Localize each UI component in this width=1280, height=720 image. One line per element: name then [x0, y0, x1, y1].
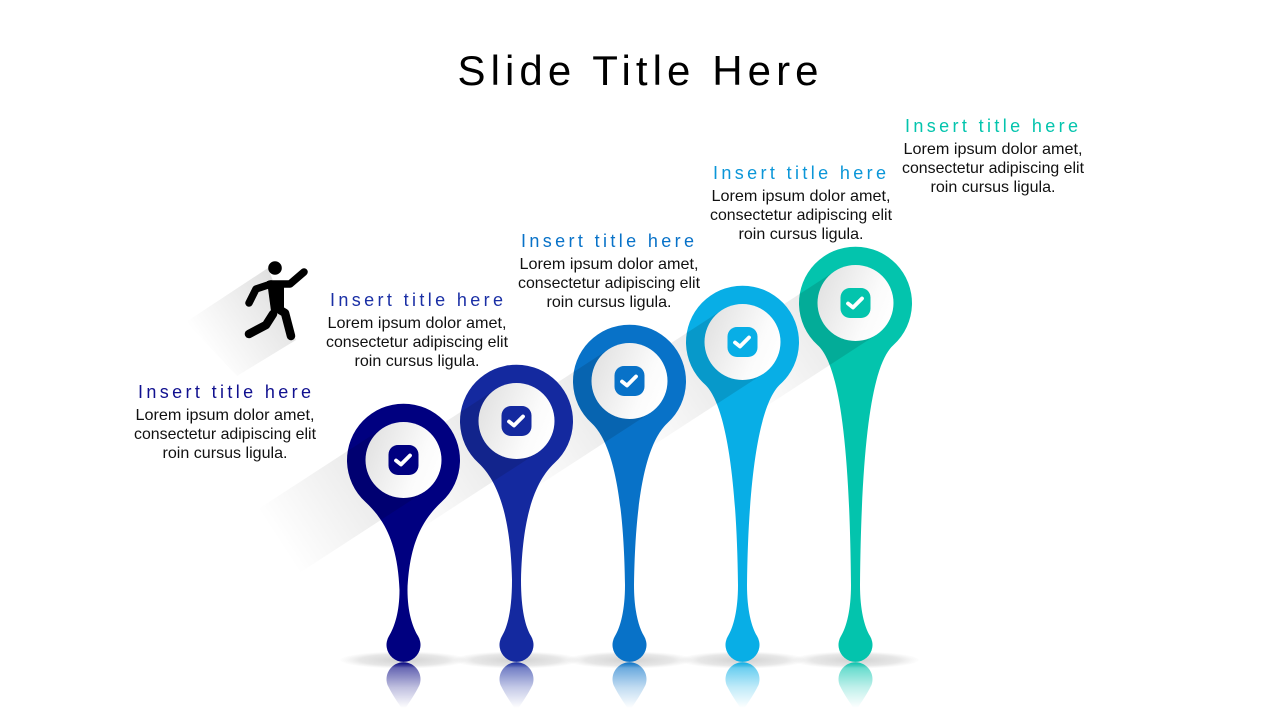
pin 4 check icon: [728, 327, 758, 357]
pin 4 disc: [704, 304, 780, 380]
text block 4: roin cursus ligula.: [738, 226, 864, 243]
text block 1: Insert title here: [138, 382, 311, 402]
pin 2 check icon: [502, 406, 532, 436]
text block 5: Insert title here: [905, 116, 1078, 136]
pin 1: [347, 404, 460, 706]
pin 3 check icon: [614, 366, 644, 396]
text block 4: Lorem ipsum dolor amet,: [712, 188, 890, 205]
pin 1 check icon: [388, 445, 418, 475]
title: Slide Title Here: [458, 47, 818, 94]
pin 5 disc: [818, 265, 894, 341]
text block 2: Lorem ipsum dolor amet,: [328, 315, 506, 332]
pin 4: [686, 286, 799, 706]
text block 5: Lorem ipsum dolor amet,: [904, 141, 1082, 158]
text block 4: [710, 163, 893, 243]
pin 5: [799, 246, 912, 706]
text block 1: Lorem ipsum dolor amet,: [136, 407, 314, 424]
pin 3 body: [573, 325, 686, 662]
text block 1: consectetur adipiscing elit: [134, 426, 317, 443]
text block 1: [134, 382, 317, 462]
pin 1 reflection: [386, 662, 420, 708]
pin 3 disc: [592, 343, 668, 419]
long shadows behind pins: [257, 271, 876, 574]
runner icon with shadow: [186, 261, 304, 376]
text block 5: [902, 116, 1085, 196]
pin 1 disc: [366, 422, 442, 498]
text block 4: Insert title here: [713, 163, 886, 183]
text block 1: roin cursus ligula.: [162, 445, 288, 462]
pin 4 body: [686, 286, 799, 662]
pin 4 reflection: [726, 662, 760, 708]
pin 5 check icon: [840, 288, 870, 318]
text block 3: consectetur adipiscing elit: [518, 275, 701, 292]
text block 2: Insert title here: [330, 290, 503, 310]
pin 3: [573, 324, 686, 706]
text block 5: roin cursus ligula.: [930, 179, 1056, 196]
pin 2 body: [460, 365, 573, 662]
pin 2 reflection: [500, 662, 534, 708]
text block 3: Lorem ipsum dolor amet,: [520, 256, 698, 273]
pin 2 disc: [478, 383, 554, 459]
text block 4: consectetur adipiscing elit: [710, 207, 893, 224]
text block 2: [326, 290, 509, 370]
pin 1 body: [347, 404, 460, 662]
text block 3: [518, 231, 701, 311]
text block 2: consectetur adipiscing elit: [326, 334, 509, 351]
pin 5 reflection: [838, 662, 872, 708]
text block 5: consectetur adipiscing elit: [902, 160, 1085, 177]
pin 3 reflection: [612, 662, 646, 708]
text block 2: roin cursus ligula.: [354, 353, 480, 370]
text block 3: roin cursus ligula.: [546, 294, 672, 311]
ground shadows: [340, 652, 918, 668]
text block 3: Insert title here: [521, 231, 694, 251]
pin 2: [460, 364, 573, 705]
pin 5 body: [799, 247, 912, 662]
